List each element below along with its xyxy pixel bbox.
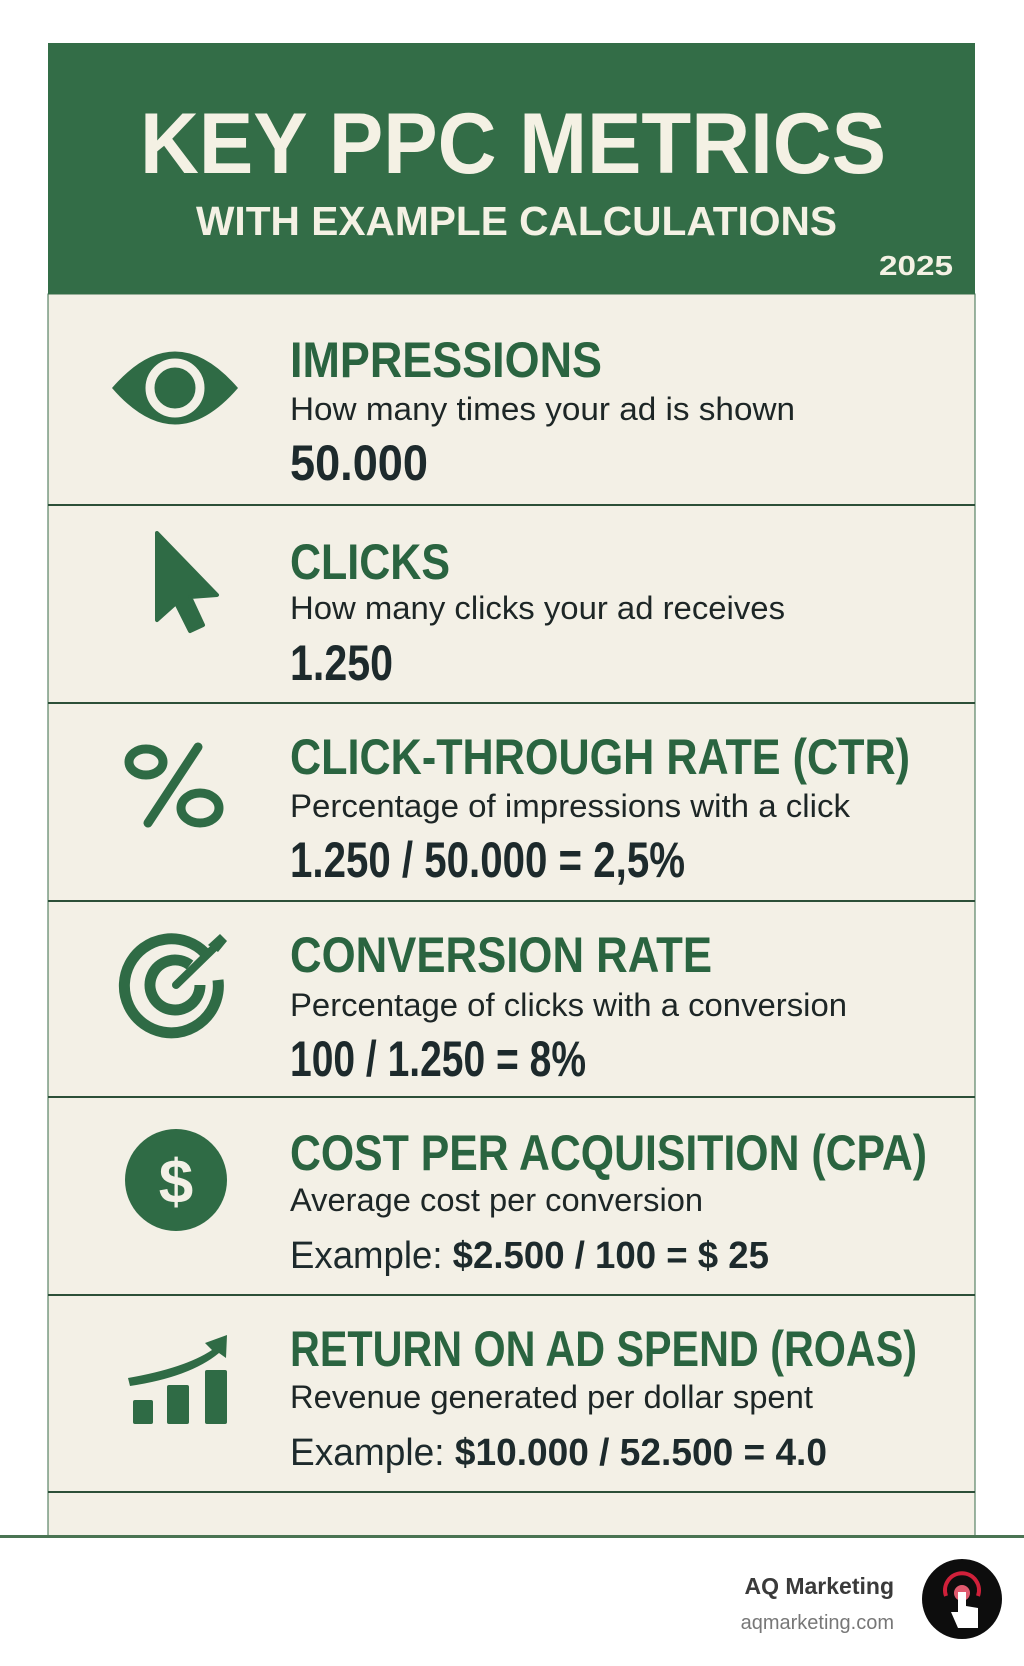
row: clicks: How many clicks your ad receives	[290, 590, 785, 626]
row: conversion rate: Percentage of clicks with a conversion	[290, 987, 847, 1023]
footer brand: AQ Marketing	[744, 1573, 894, 1599]
row: roas: Example: $10.000 / 52.500 = 4.0	[290, 1432, 827, 1474]
row: impressions: IMPRESSIONS	[290, 332, 602, 388]
row: impressions	[112, 332, 795, 491]
row: conversion rate: CONVERSION RATE	[290, 927, 712, 983]
header banner	[48, 43, 975, 294]
icon: growth chart	[128, 1335, 227, 1424]
row: ctr: CLICK-THROUGH RATE (CTR)	[290, 729, 910, 785]
row: roas: Revenue generated per dollar spent	[290, 1379, 813, 1415]
row: conversion rate: 100 / 1.250 = 8%	[290, 1031, 586, 1087]
row: impressions: How many times your ad is shown	[290, 391, 795, 427]
title: KEY PPC METRICS	[140, 96, 886, 192]
row: ctr: 1.250 / 50.000 = 2,5%	[290, 832, 685, 888]
row: cpa: Average cost per conversion	[290, 1182, 703, 1218]
panel background	[48, 294, 975, 1536]
row: conversion rate	[124, 927, 847, 1087]
row: roas	[128, 1321, 917, 1474]
row: cpa	[125, 1125, 927, 1277]
footer brand	[741, 1559, 1002, 1639]
icon: dollar coin	[125, 1129, 227, 1231]
icon: target	[124, 934, 227, 1033]
row: impressions: 50.000	[290, 435, 428, 491]
icon: dollar coin: $	[159, 1148, 193, 1217]
icon: eye	[112, 352, 238, 424]
icon: percent	[129, 747, 219, 823]
subtitle: WITH EXAMPLE CALCULATIONS	[196, 198, 837, 244]
row: cpa: COST PER ACQUISITION (CPA)	[290, 1125, 927, 1181]
footer divider	[0, 1535, 1024, 1538]
row: clicks: 1.250	[290, 635, 393, 691]
row: clicks: CLICKS	[290, 534, 450, 590]
row: clicks	[157, 533, 785, 691]
row: ctr	[129, 729, 910, 888]
row: cpa: Example: $2.500 / 100 = $ 25	[290, 1235, 769, 1277]
footer brand: aqmarketing.com	[741, 1612, 894, 1634]
icon: logo	[922, 1559, 1002, 1639]
year: 2025	[879, 250, 953, 281]
icon: cursor	[157, 533, 217, 631]
row: ctr: Percentage of impressions with a click	[290, 788, 851, 824]
